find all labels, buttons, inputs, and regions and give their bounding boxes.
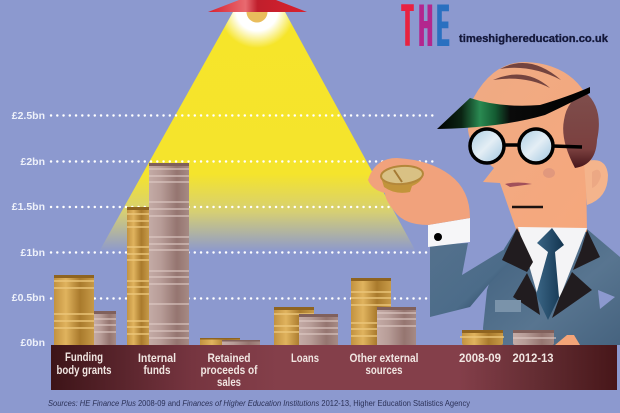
shirt cuff bbox=[428, 218, 470, 247]
y axis labels: £2.5bn bbox=[12, 110, 45, 122]
category labels: Other external bbox=[350, 353, 418, 365]
category labels: proceeds of bbox=[200, 365, 258, 377]
legend coins bbox=[460, 330, 556, 345]
ear inner bbox=[592, 170, 601, 188]
category labels: body grants bbox=[56, 365, 112, 377]
jacket bbox=[483, 228, 620, 345]
neck and head bbox=[468, 62, 597, 232]
logo: THE bbox=[402, 0, 449, 60]
stack: internal funds 2012-13 bbox=[149, 163, 189, 345]
y axis labels: £0.5bn bbox=[12, 292, 45, 304]
category labels: funds bbox=[144, 365, 170, 377]
category labels: sales bbox=[217, 377, 241, 389]
legend labels: 2012-13 bbox=[512, 353, 554, 365]
stack: other external 2008-09 bbox=[351, 278, 391, 345]
breast pocket bbox=[495, 300, 521, 312]
source note: Sources: HE Finance Plus 2008-09 and Finances of Higher Education Institutions 2012-13, Higher Education Statistics Agency bbox=[48, 398, 471, 408]
gridlines bbox=[51, 116, 433, 298]
cufflink bbox=[434, 233, 442, 241]
stack: funding body grants 2012-13 bbox=[94, 311, 116, 345]
stack: internal funds 2008-09 bbox=[127, 207, 149, 345]
illustration: man with coin bbox=[368, 62, 620, 345]
light beam bbox=[100, 0, 415, 250]
stack: loans 2008-09 bbox=[274, 307, 314, 345]
stack: other external 2012-13 bbox=[377, 307, 416, 345]
stack: retained proceeds 2012-13 bbox=[222, 340, 260, 345]
glasses bbox=[470, 129, 582, 163]
hair side bbox=[563, 92, 599, 168]
hand bbox=[368, 158, 470, 225]
legend labels: 2008-09 bbox=[459, 353, 501, 365]
shirt collar bbox=[518, 227, 587, 297]
legend coin: 2012-13 bbox=[513, 330, 556, 345]
stack: retained proceeds 2008-09 bbox=[200, 338, 240, 345]
y axis labels: £2bn bbox=[20, 156, 45, 168]
coin stacks chart bbox=[54, 163, 416, 345]
arm sleeve bbox=[430, 243, 510, 317]
tie bbox=[536, 228, 564, 320]
category labels: Loans bbox=[291, 353, 319, 365]
cheek blush bbox=[543, 168, 555, 178]
lapels bbox=[502, 228, 600, 318]
y axis labels: £0bn bbox=[20, 337, 45, 349]
y axis labels: £1bn bbox=[20, 247, 45, 259]
nose shadow bbox=[505, 182, 532, 187]
bottom label band bbox=[51, 345, 617, 390]
category labels: Retained bbox=[208, 353, 250, 365]
pocket square bbox=[598, 290, 615, 309]
stack: loans 2012-13 bbox=[299, 314, 338, 345]
lamp bbox=[208, 0, 307, 22]
category labels: Internal bbox=[138, 353, 176, 365]
coin bbox=[380, 165, 424, 193]
category labels bbox=[56, 352, 418, 389]
ear bbox=[584, 160, 608, 205]
stack: funding body grants 2008-09 bbox=[54, 275, 94, 345]
category labels: sources bbox=[366, 365, 402, 377]
visor bbox=[437, 87, 590, 129]
hair strands bbox=[493, 63, 561, 88]
y axis labels bbox=[12, 110, 45, 349]
legend coin: 2008-09 bbox=[460, 330, 504, 345]
y axis labels: £1.5bn bbox=[12, 201, 45, 213]
category labels: Funding bbox=[65, 352, 103, 364]
second hand bbox=[555, 335, 580, 345]
mouth bbox=[512, 206, 543, 208]
website url: timeshighereducation.co.uk bbox=[459, 33, 609, 45]
legend labels bbox=[459, 353, 554, 365]
